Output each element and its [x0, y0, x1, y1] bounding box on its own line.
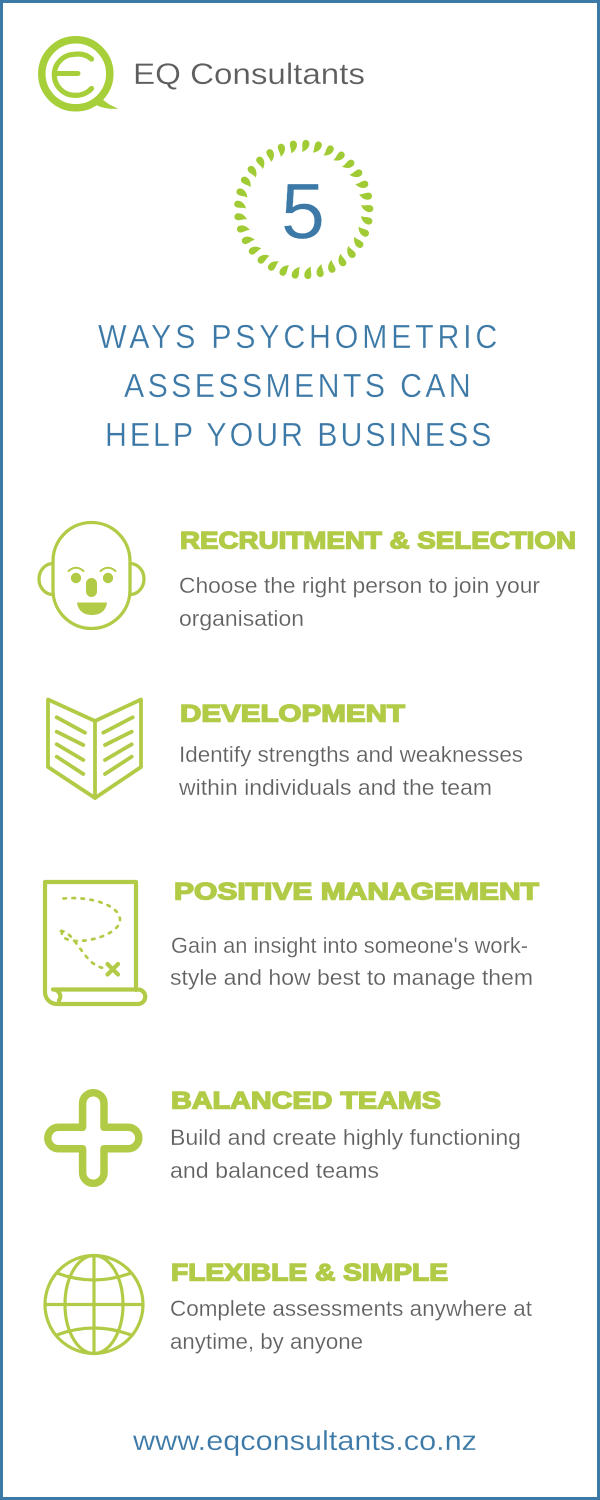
panel: development [48, 700, 523, 800]
number 5: 5 [281, 166, 325, 255]
body text: Gain an insight into someone's work- [171, 933, 528, 958]
heading: FLEXIBLE & SIMPLE [171, 1260, 448, 1286]
body text: within individuals and the team [178, 775, 492, 800]
panel: recruitment and selection [39, 522, 576, 631]
heading: BALANCED TEAMS [171, 1088, 441, 1114]
body text [170, 1296, 532, 1354]
heading: POSITIVE MANAGEMENT [174, 878, 539, 906]
website address: www.eqconsultants.co.nz [132, 1425, 477, 1456]
number 5 in leaf wreath [234, 140, 373, 279]
title: HELP YOUR BUSINESS [105, 416, 491, 453]
icon: treasure map scroll [45, 882, 145, 1004]
panel: balanced teams [48, 1088, 521, 1183]
logo: EQ Consultants [42, 40, 365, 109]
icon: face [39, 522, 144, 629]
body text [179, 573, 540, 631]
icon: open book [48, 700, 141, 798]
heading: RECRUITMENT & SELECTION [180, 528, 576, 554]
title: WAYS PSYCHOMETRIC [98, 318, 497, 355]
leaf wreath [234, 140, 373, 279]
icon: plus [48, 1093, 139, 1183]
heading: DEVELOPMENT [180, 700, 405, 728]
body text [170, 933, 533, 990]
body text: Choose the right person to join your [179, 573, 540, 598]
body text: organisation [179, 606, 304, 631]
logo wordmark: EQ Consultants [133, 58, 365, 91]
body text [170, 1125, 521, 1183]
icon: globe [45, 1256, 143, 1354]
body text: Complete assessments anywhere at [170, 1296, 532, 1321]
panel: positive management [45, 878, 539, 1004]
panel: flexible and simple [45, 1256, 532, 1354]
body text: Identify strengths and weaknesses [179, 742, 523, 767]
body text: and balanced teams [170, 1158, 379, 1183]
title [98, 318, 497, 453]
icon: EQ speech bubble [42, 40, 118, 109]
body text: Build and create highly functioning [170, 1125, 521, 1150]
body text: style and how best to manage them [170, 965, 533, 990]
body text: anytime, by anyone [170, 1329, 363, 1354]
title: ASSESSMENTS CAN [124, 367, 471, 404]
body text [178, 742, 523, 800]
